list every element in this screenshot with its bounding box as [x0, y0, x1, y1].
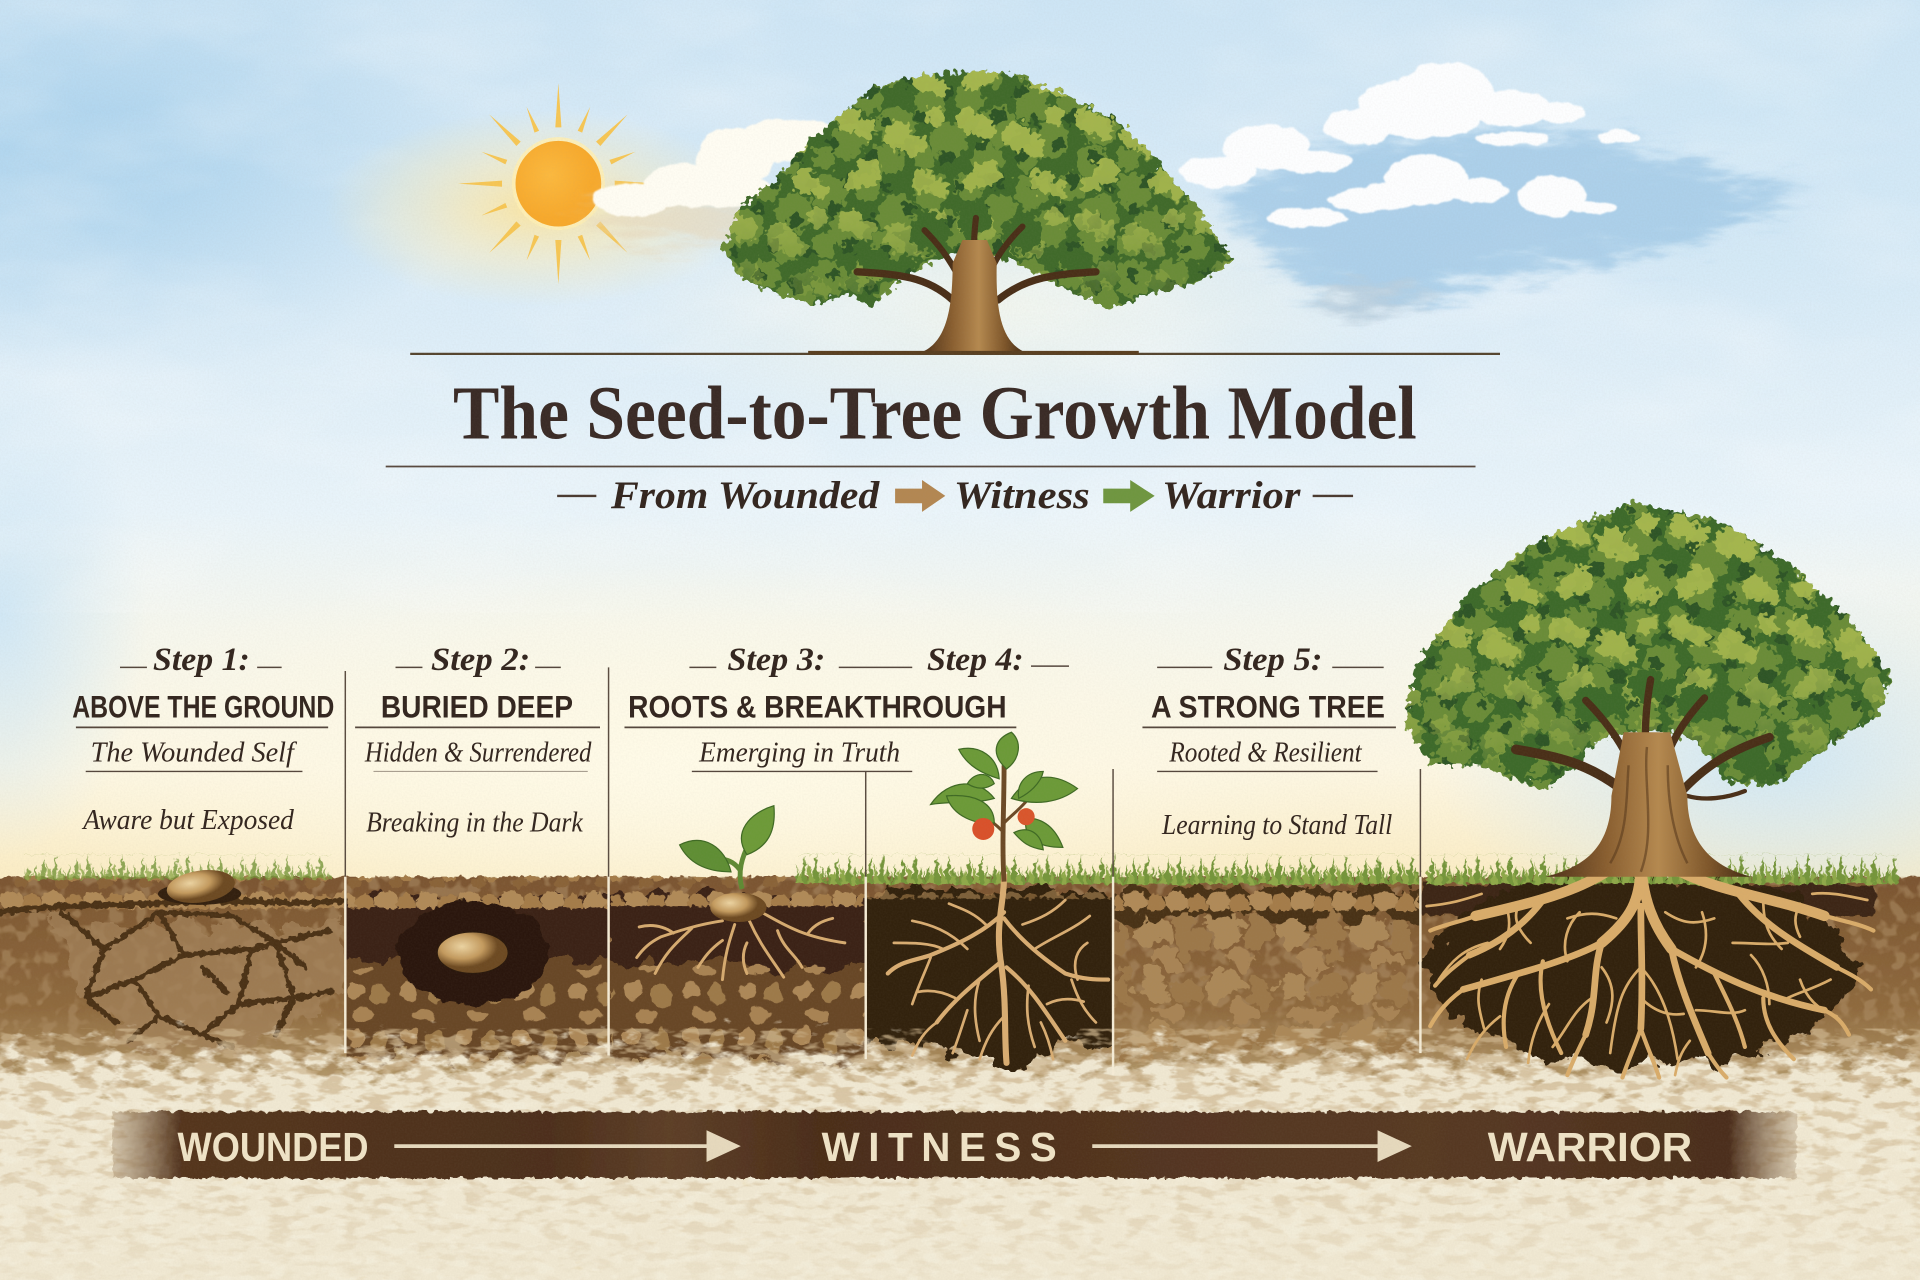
icon: surface seed [158, 866, 241, 907]
title: The Seed-to-Tree Growth Model [453, 371, 1417, 455]
soil panel 3: dark earth [600, 877, 876, 1059]
step 3: Step 3: [727, 642, 825, 678]
arrow: witness to warrior [1092, 1130, 1412, 1162]
soil panel 6: dark earth under big tree [1422, 872, 1875, 1063]
grass [24, 855, 1898, 885]
progress banner [113, 1112, 1796, 1178]
icon: sprouted seed [710, 893, 767, 922]
progress banner: WOUNDED [178, 1124, 369, 1170]
tree canopy [722, 71, 1234, 310]
step 2 [355, 642, 600, 973]
sun [324, 83, 753, 306]
soil panel 2: dark earth [331, 877, 624, 1063]
panel dividers [345, 667, 1420, 1075]
cloud behind tree [588, 119, 838, 242]
tree trunk and branches [857, 218, 1096, 353]
soil panel 5: tan clods [1102, 884, 1433, 1053]
tree canopy [1407, 502, 1891, 790]
step 2: BURIED DEEP [381, 689, 573, 725]
step 1: The Wounded Self [91, 738, 298, 769]
step 5: Step 5: [1223, 642, 1322, 678]
step 1: Step 1: [153, 642, 250, 678]
subtitle: Witness [954, 474, 1090, 517]
soil band [0, 872, 1920, 1116]
step 3: Emerging in Truth [698, 738, 900, 769]
step 2: Breaking in the Dark [366, 807, 583, 838]
step 5: Rooted & Resilient [1168, 738, 1363, 769]
soil panel 4: dark earth [851, 882, 1127, 1044]
title rules [386, 353, 1500, 467]
icon: plant with fruit [931, 732, 1078, 882]
step 3 [624, 642, 1016, 980]
step 2: Step 2: [431, 642, 530, 678]
arrow: brown [895, 480, 945, 512]
progress banner: WITNESS [822, 1124, 1057, 1170]
top tree [722, 71, 1234, 353]
step 5: Learning to Stand Tall [1161, 810, 1392, 841]
cloud right of tree [1179, 62, 1806, 315]
step 1: Aware but Exposed [81, 805, 295, 836]
sand ground [0, 998, 1920, 1280]
arrow: wounded to witness [394, 1130, 741, 1162]
step 4 [888, 642, 1108, 1063]
icon: sprout [680, 806, 774, 889]
subtitle [557, 474, 1353, 517]
step 5 [1142, 642, 1396, 841]
tree trunk and branches [1516, 680, 1769, 877]
icon: plant roots [888, 876, 1108, 1063]
soil panel 1: cracked earth [0, 877, 345, 1053]
step 2: Hidden & Surrendered [364, 738, 592, 769]
step 5: A STRONG TREE [1151, 689, 1385, 725]
subtitle: From Wounded [610, 474, 881, 517]
step 1 [72, 642, 334, 907]
step 4: Step 4: [927, 642, 1024, 678]
tree roots [1427, 863, 1873, 1078]
step 3: ROOTS & BREAKTHROUGH [628, 689, 1007, 725]
icon: buried seed [437, 932, 508, 973]
icon: seed roots [637, 912, 845, 980]
arrow: green [1103, 480, 1155, 512]
deep root soil [918, 905, 1843, 1067]
subtitle: Warrior [1162, 474, 1301, 517]
big tree [1407, 502, 1891, 1078]
step 1: ABOVE THE GROUND [72, 689, 334, 725]
progress banner: WARRIOR [1488, 1124, 1692, 1170]
